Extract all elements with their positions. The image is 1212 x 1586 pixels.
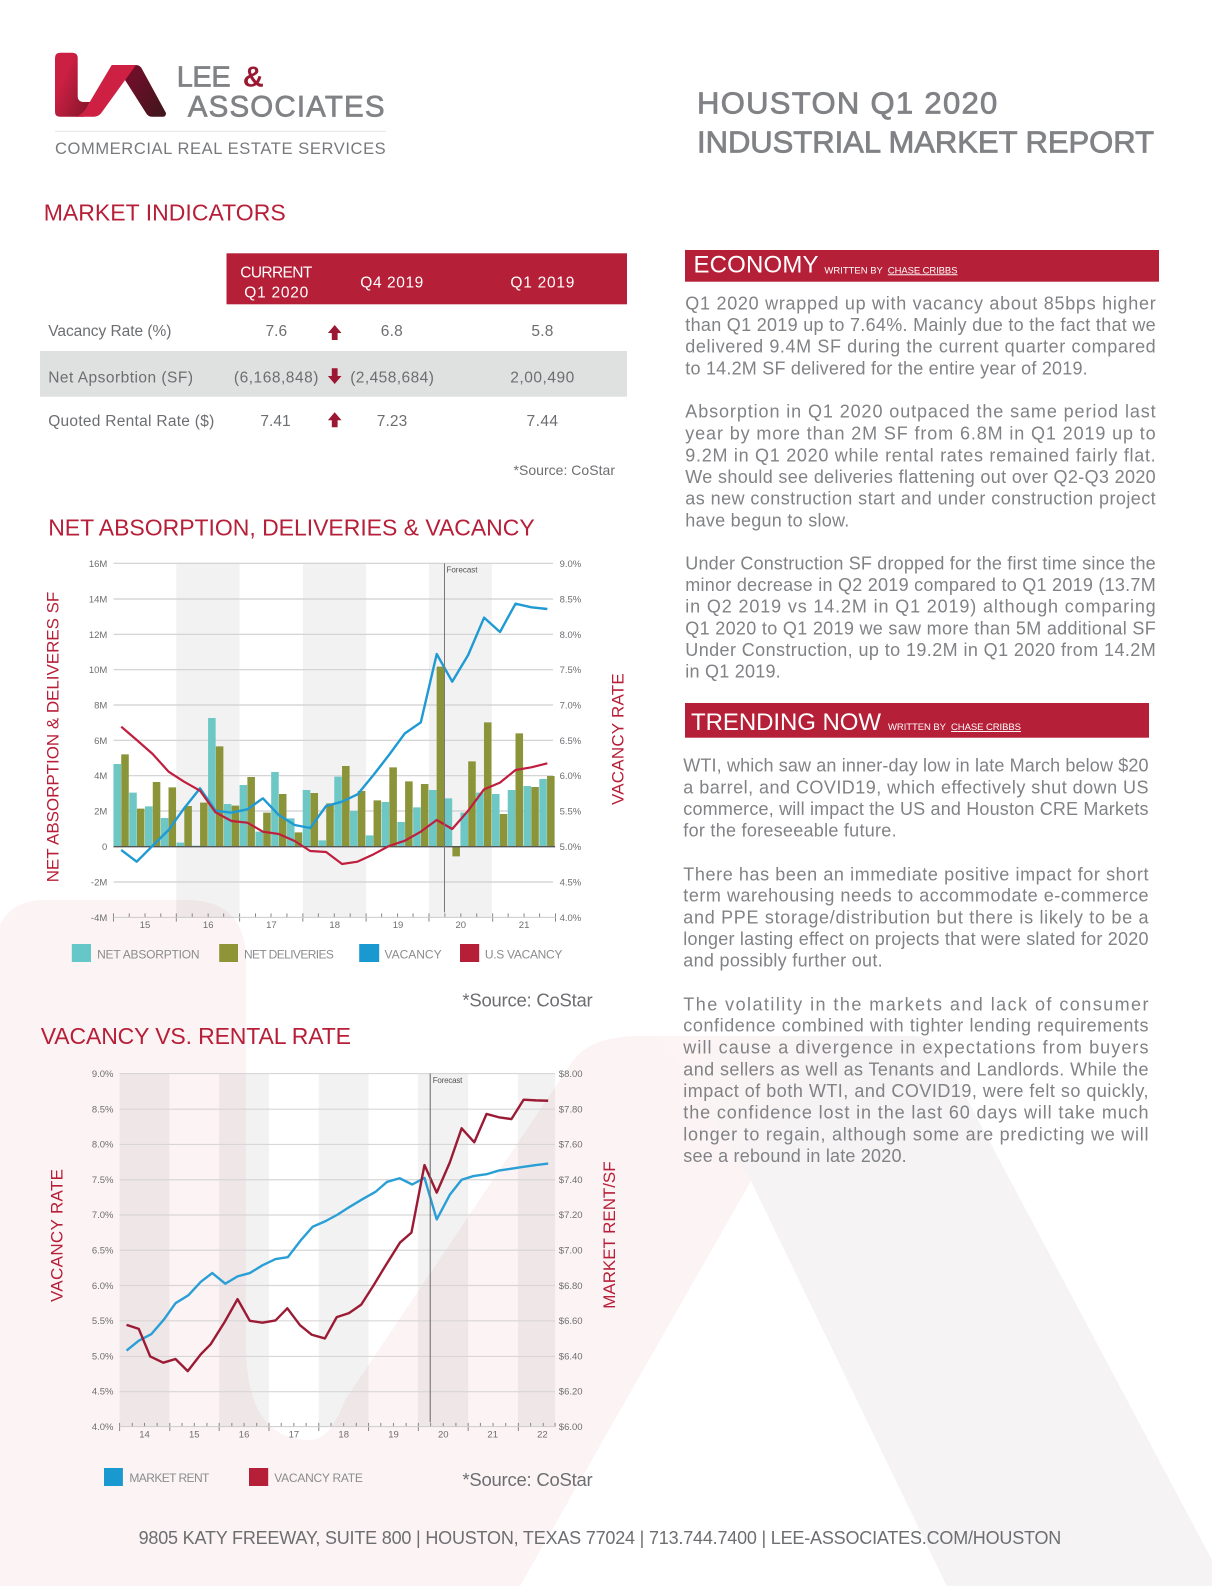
forecast label: Forecast: [446, 565, 478, 574]
x axis labels: 16: [203, 920, 213, 931]
right axis labels: 6.0%: [560, 771, 582, 782]
right axis labels: $7.40: [559, 1175, 583, 1186]
x axis labels: 14: [139, 1430, 150, 1441]
line: vacancy: [121, 604, 547, 862]
x axis labels: 15: [189, 1430, 200, 1441]
right axis labels: [560, 559, 582, 924]
right axis labels: $6.00: [559, 1422, 583, 1433]
trending now text block: see a rebound in late 2020.: [683, 1146, 907, 1166]
economy text block: as new construction start and under construction project: [685, 489, 1156, 509]
row: net absorption: 2,00,490: [510, 369, 575, 386]
economy text block: in Q1 2019.: [685, 662, 781, 682]
icon: logo mark: [55, 53, 166, 117]
economy text block: Absorption in Q1 2020 outpaced the same period last: [685, 402, 1156, 422]
plot area: [113, 563, 556, 922]
right axis labels: 4.0%: [560, 913, 582, 924]
logo wordmark: COMMERCIAL REAL ESTATE SERVICES: [55, 140, 386, 158]
trending now text block: [682, 756, 1149, 1166]
left axis labels: 12M: [89, 630, 107, 641]
x axis labels: [139, 1430, 548, 1441]
right axis title: MARKET RENT/SF: [600, 1161, 619, 1309]
left axis labels: 9.0%: [92, 1069, 114, 1080]
background watermark: logo shape: [0, 900, 1212, 1586]
right axis labels: 8.0%: [560, 630, 582, 641]
right axis labels: 5.0%: [560, 842, 582, 853]
icon: up arrow: [328, 325, 342, 340]
row: net absorption: (2,458,684): [350, 369, 434, 386]
trending now text block: for the foreseeable future.: [683, 821, 897, 841]
legend: U.S VACANCY: [485, 947, 562, 961]
left axis labels: 4M: [94, 771, 107, 782]
trending now text block: and sellers as well as Tenants and Landlords. While the: [683, 1059, 1148, 1079]
left axis labels: 6M: [94, 736, 107, 747]
left axis labels: [89, 559, 107, 924]
trending now text block: and possibly further out.: [683, 951, 883, 971]
trending now header bar: WRITTEN BY: [888, 722, 947, 733]
panel: market indicators table: [40, 253, 627, 478]
x axis labels: 15: [140, 920, 150, 931]
legend: NET ABSORPTION: [97, 947, 200, 961]
legend: [104, 1468, 363, 1486]
left axis title: VACANCY RATE: [47, 1169, 66, 1302]
x axis labels: 21: [519, 920, 529, 931]
left axis labels: -2M: [91, 878, 107, 888]
row: vacancy rate: [48, 323, 553, 340]
x axis labels: 20: [438, 1430, 449, 1441]
left axis labels: 6.0%: [92, 1281, 114, 1292]
line: vacancy rate: [127, 1100, 548, 1371]
trending now text block: longer lasting effect on projects that were slated for 2020: [683, 929, 1148, 949]
right axis labels: $7.60: [559, 1140, 583, 1151]
economy text block: Under Construction, up to 19.2M in Q1 2020 from 14.2M: [685, 640, 1156, 660]
trending now header bar: [685, 703, 1149, 738]
left axis labels: 7.5%: [92, 1175, 114, 1186]
right axis labels: 9.0%: [560, 559, 582, 570]
left axis labels: 14M: [89, 594, 107, 606]
icon: up arrow: [328, 412, 342, 427]
x axis labels: 17: [266, 920, 277, 931]
economy text block: Q1 2020 wrapped up with vacancy about 85bps higher: [685, 293, 1156, 313]
left axis labels: 10M: [89, 665, 107, 676]
left axis labels: 4.0%: [92, 1422, 114, 1433]
right axis labels: [559, 1069, 583, 1433]
economy text block: delivered 9.4M SF during the current quarter compared: [685, 337, 1156, 357]
row: net absorption: Net Apsorbtion (SF): [48, 369, 193, 386]
bars: net deliveries: [121, 667, 555, 856]
right axis labels: $7.80: [559, 1104, 583, 1115]
row: vacancy rate: 7.6: [266, 323, 287, 340]
trending now text block: commerce, will impact the US and Houston CRE Markets: [683, 799, 1148, 819]
forecast marker: [443, 563, 445, 912]
trending now header bar: CHASE CRIBBS: [951, 722, 1021, 733]
legend: VACANCY RATE: [274, 1471, 363, 1485]
economy text block: Q1 2020 to Q1 2019 we saw more than 5M additional SF: [685, 618, 1156, 638]
trending now text block: impact of both WTI, and COVID19, were felt so quickly,: [683, 1081, 1148, 1101]
left axis labels: 2M: [94, 806, 107, 818]
table header row: Q1 2020: [244, 284, 309, 301]
logo wordmark: LEE: [177, 62, 231, 94]
economy header bar: [685, 250, 1159, 282]
table header row: Q4 2019: [360, 274, 423, 291]
right axis labels: $8.00: [559, 1069, 583, 1080]
economy text block: to 14.2M SF delivered for the entire year of 2019.: [685, 358, 1088, 378]
trending now text block: The volatility in the markets and lack of consumer: [683, 994, 1148, 1014]
x axis labels: 19: [388, 1430, 399, 1441]
row: quoted rental rate: Quoted Rental Rate ($): [48, 413, 214, 430]
table header row: Q1 2019: [510, 274, 574, 291]
right axis labels: $6.80: [559, 1281, 583, 1292]
trending now text block: WTI, which saw an inner-day low in late March below $20: [683, 756, 1148, 776]
trending now text block: and PPE storage/distribution but there is likely to be a: [683, 907, 1149, 927]
left axis title: NET ABSORPTION & DELIVERES SF: [43, 592, 62, 882]
right axis labels: 4.5%: [560, 878, 582, 888]
logo: Lee & Associates: [55, 53, 386, 158]
right axis labels: 8.5%: [560, 594, 582, 606]
table header row: [226, 253, 627, 304]
row: vacancy rate: 6.8: [381, 323, 403, 340]
economy text block: Under Construction SF dropped for the first time since the: [685, 553, 1156, 573]
row: vacancy rate: 5.8: [531, 323, 553, 340]
x axis labels: 22: [537, 1430, 548, 1441]
source note: *Source: CoStar: [462, 990, 593, 1011]
economy text block: in Q2 2019 vs 14.2M in Q1 2019) although comparing: [685, 597, 1156, 617]
x axis labels: 17: [289, 1430, 299, 1441]
logo wordmark: &: [243, 62, 264, 94]
plot area: [120, 1074, 555, 1431]
right axis labels: $6.60: [559, 1316, 583, 1327]
footer contact line: 9805 KATY FREEWAY, SUITE 800 | HOUSTON, TEXAS 77024 | 713.744.7400 | LEE-ASSOCIATES.COM/HOUSTON: [139, 1528, 1061, 1548]
left axis labels: 0: [102, 842, 107, 853]
economy header bar: WRITTEN BY: [824, 265, 884, 276]
trending now text block: longer to regain, although some are predicting we will: [683, 1124, 1148, 1144]
trending now header bar: TRENDING NOW: [691, 709, 881, 736]
icon: down arrow: [328, 368, 342, 384]
left axis labels: 8.5%: [92, 1104, 114, 1115]
left axis labels: 4.5%: [92, 1387, 114, 1398]
forecast label: Forecast: [433, 1076, 463, 1085]
report title: INDUSTRIAL MARKET REPORT: [697, 124, 1154, 159]
trending now text block: will cause a divergence in expectations from buyers: [682, 1037, 1148, 1057]
x axis labels: 19: [393, 920, 403, 931]
panel: trending now: [682, 703, 1149, 1166]
right axis labels: $7.00: [559, 1246, 583, 1256]
panel: economy: [685, 250, 1159, 682]
row: net absorption: [40, 351, 627, 397]
right axis labels: 6.5%: [560, 736, 582, 747]
legend: VACANCY: [384, 947, 442, 961]
trending now text block: There has been an immediate positive impact for short: [683, 865, 1148, 885]
x axis ticks: [120, 1423, 555, 1431]
row: net absorption: (6,168,848): [234, 369, 318, 386]
trending now text block: confidence combined with tighter lending requirements: [683, 1016, 1148, 1036]
economy text block: We should see deliveries flattening out over Q2-Q3 2020: [685, 467, 1156, 487]
left axis labels: 16M: [89, 559, 107, 570]
report title: HOUSTON Q1 2020: [697, 85, 997, 120]
line: U.S. vacancy: [121, 727, 547, 864]
economy text block: 9.2M in Q1 2020 while rental rates remained fairly flat.: [685, 445, 1156, 465]
heading: market indicators: MARKET INDICATORS: [44, 200, 286, 226]
right axis labels: $6.40: [559, 1351, 583, 1362]
right axis labels: $6.20: [559, 1387, 583, 1398]
chart: vacancy vs rental rate: [47, 1069, 619, 1490]
logo wordmark: [55, 62, 386, 158]
forecast marker: [429, 1074, 431, 1422]
economy text block: year by more than 2M SF from 6.8M in Q1 2019 up to: [685, 423, 1156, 443]
chart: net absorption, deliveries and vacancy: [43, 559, 627, 1011]
right axis labels: 5.5%: [560, 806, 582, 818]
bars: net absorption: [113, 718, 547, 847]
left axis labels: 8.0%: [92, 1140, 114, 1151]
x axis labels: 16: [239, 1430, 249, 1441]
row: quoted rental rate: [48, 412, 558, 430]
left axis labels: 6.5%: [92, 1246, 114, 1256]
x axis labels: 21: [487, 1430, 498, 1441]
economy header bar: ECONOMY: [694, 252, 818, 279]
line: market rent: [127, 1164, 548, 1351]
table header row: CURRENT: [240, 264, 313, 281]
x axis labels: 20: [456, 920, 466, 931]
economy text block: [685, 293, 1156, 682]
logo wordmark: ASSOCIATES: [188, 91, 384, 124]
trending now text block: a barrel, and COVID19, which effectively shut down US: [683, 777, 1148, 797]
left axis labels: 7.0%: [92, 1210, 114, 1221]
left axis labels: 8M: [94, 700, 107, 712]
row: quoted rental rate: 7.23: [377, 413, 407, 430]
legend: MARKET RENT: [129, 1471, 210, 1485]
x axis ticks: [113, 913, 556, 922]
x axis labels: 18: [338, 1430, 349, 1441]
left axis labels: -4M: [91, 913, 107, 924]
report title: [697, 85, 1154, 159]
left axis labels: 5.0%: [92, 1351, 114, 1362]
row: quoted rental rate: 7.44: [526, 413, 558, 430]
economy header bar: CHASE CRIBBS: [888, 265, 958, 276]
source note: *Source: CoStar: [514, 462, 615, 478]
x axis labels: 18: [329, 920, 340, 931]
left axis labels: [92, 1069, 114, 1433]
right axis labels: 7.0%: [560, 700, 582, 712]
trending now text block: term warehousing needs to accommodate e-commerce: [683, 886, 1148, 906]
economy text block: have begun to slow.: [685, 510, 849, 530]
legend: NET DELIVERIES: [244, 947, 334, 961]
left axis labels: 5.5%: [92, 1316, 114, 1327]
right axis title: VACANCY RATE: [608, 673, 627, 805]
right axis labels: 7.5%: [560, 665, 582, 676]
legend: [72, 944, 562, 962]
trending now text block: the confidence lost in the last 60 days will take much: [683, 1102, 1148, 1122]
economy text block: minor decrease in Q2 2019 compared to Q1 2019 (13.7M: [685, 575, 1156, 595]
economy text block: than Q1 2019 up to 7.64%. Mainly due to the fact that we: [685, 315, 1156, 335]
right axis labels: $7.20: [559, 1210, 583, 1221]
row: quoted rental rate: 7.41: [260, 413, 291, 430]
source note: *Source: CoStar: [462, 1469, 593, 1490]
heading: net absorption chart: NET ABSORPTION, DELIVERIES & VACANCY: [48, 515, 535, 541]
heading: vacancy vs rental rate: VACANCY VS. RENTAL RATE: [41, 1023, 351, 1049]
row: vacancy rate: Vacancy Rate (%): [48, 323, 171, 340]
x axis labels: [140, 920, 529, 931]
